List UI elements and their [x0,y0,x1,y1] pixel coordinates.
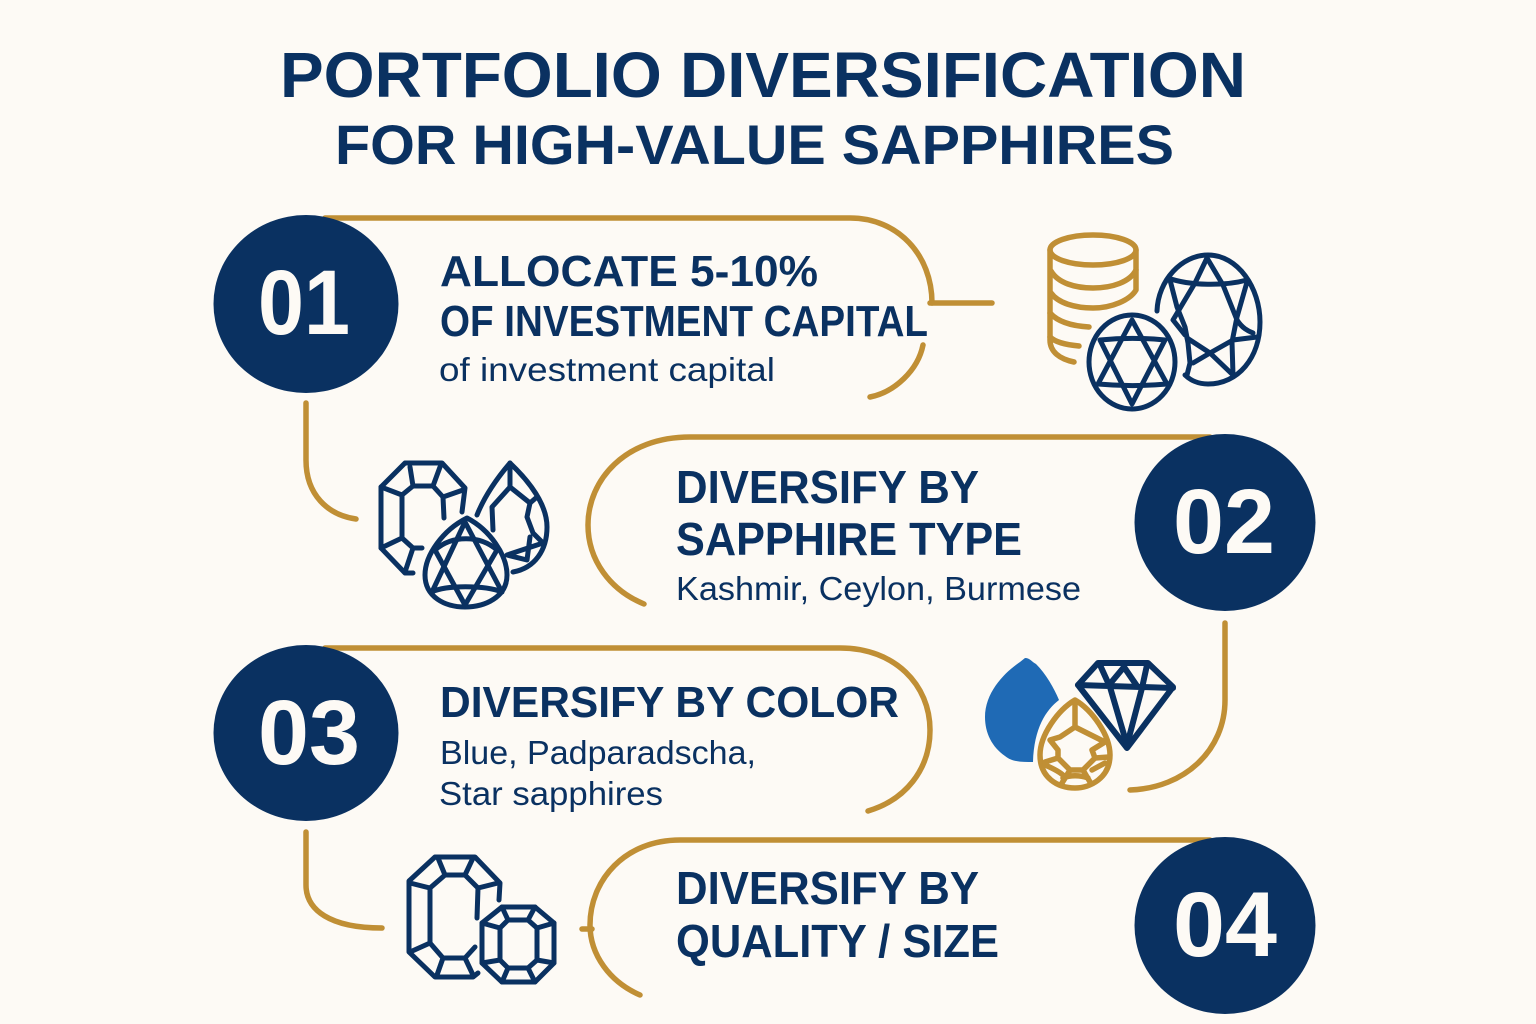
icon: blue teardrop [985,658,1059,762]
icon: coin stack [1050,235,1136,362]
icon: coins and sapphires [1050,235,1260,409]
icon: round sapphire [1089,315,1175,409]
connector: step 3 to gems [306,832,382,928]
step 3 text: DIVERSIFY BY COLOR [440,678,899,727]
step 2 badge: 02 [1173,471,1275,573]
icon: two octagon sapphires [409,857,554,982]
connector: step 3 frame [325,648,930,811]
step 4 badge [1134,837,1316,1014]
title: FOR HIGH-VALUE SAPPHIRES [335,113,1174,176]
step 4 badge: 04 [1173,874,1277,976]
icon: emerald cut gem [381,463,465,573]
title [280,39,1246,176]
connector: step 2 to gems [1130,623,1225,790]
step 3 text: Star sapphires [439,775,663,812]
icon: small octagon gem [482,907,554,982]
step 2 text: DIVERSIFY BY [676,461,979,513]
step 1 text [439,247,928,388]
step 1 badge [214,215,398,393]
step 3 badge [214,645,398,821]
step 2 text: SAPPHIRE TYPE [676,513,1022,565]
step 1 text: ALLOCATE 5-10% [440,247,818,296]
title: PORTFOLIO DIVERSIFICATION [280,39,1246,111]
step 3 text [439,678,899,812]
icon: large octagon gem [409,857,500,977]
icon: pear cut gem [477,463,547,572]
connector: step 2 frame [588,437,1210,604]
step 3 badge: 03 [258,682,360,784]
step 3 text: Blue, Padparadscha, [440,734,756,771]
icon: trillion cut gem [425,518,507,607]
connector: step 4 frame [582,840,1210,995]
step 1 text: OF INVESTMENT CAPITAL [440,297,928,346]
icon: navy diamond [1078,663,1173,748]
connector: step 1 frame [325,218,992,397]
connector: step 1 to gems [306,403,356,519]
icon: gold pear gem [1040,700,1110,788]
step 1 text: of investment capital [439,351,775,388]
step 2 badge [1134,434,1316,611]
icon: coloured gems [985,658,1173,788]
step 4 text [676,862,999,967]
step 1 badge: 01 [258,252,350,354]
step 2 text: Kashmir, Ceylon, Burmese [676,570,1081,607]
step 4 text: DIVERSIFY BY [676,862,979,914]
step 2 text [676,461,1081,607]
step 4 text: QUALITY / SIZE [676,915,999,967]
icon: oval sapphire [1157,255,1260,384]
icon: three sapphires [381,463,547,607]
